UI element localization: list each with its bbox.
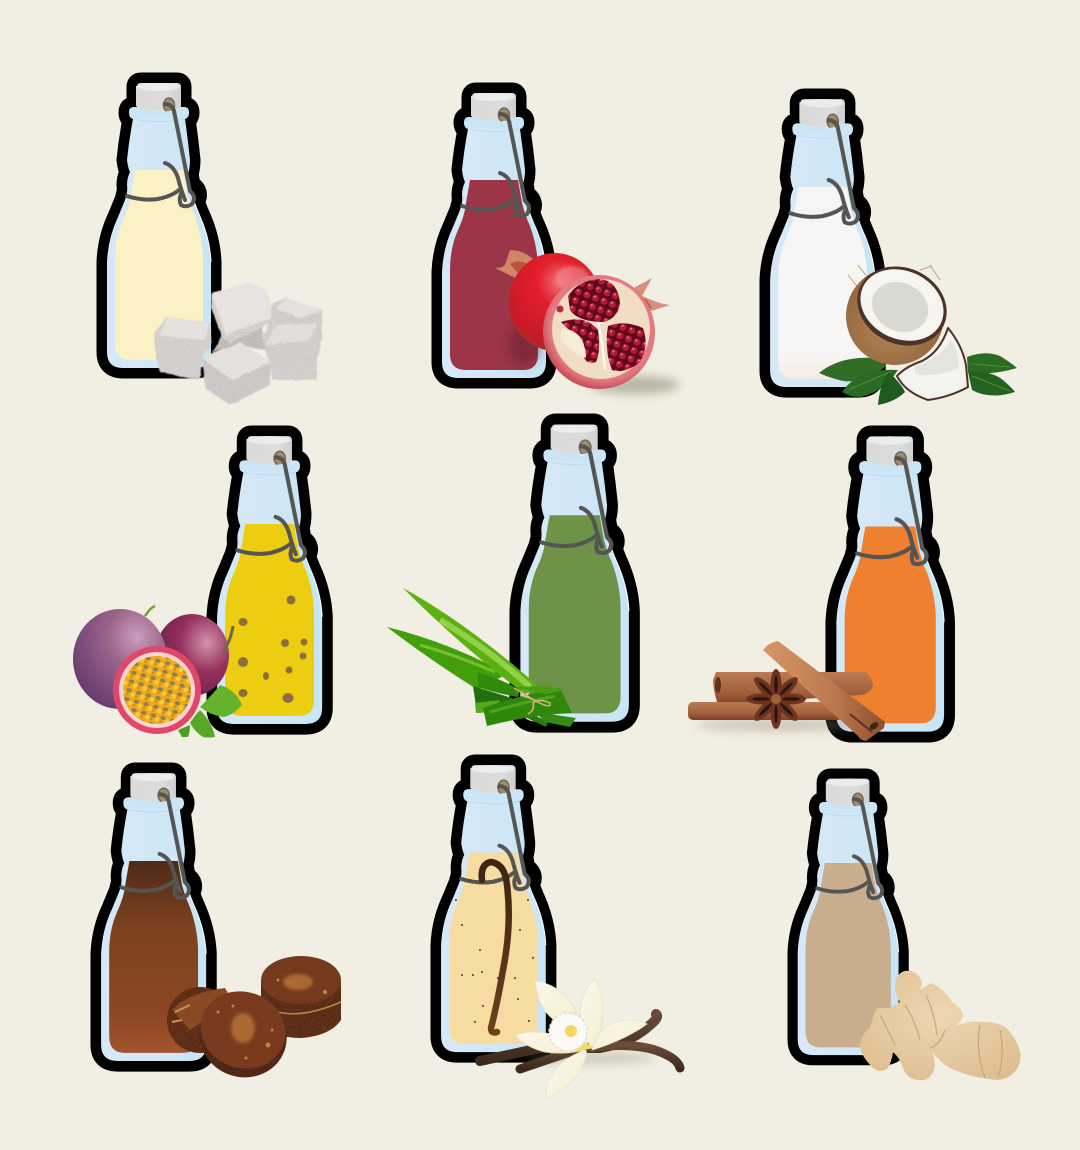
icon: palm sugar discs	[167, 956, 341, 1090]
bottle: palm sugar syrup	[101, 773, 206, 1061]
bottle: coconut syrup	[770, 99, 875, 387]
bottle: spice syrup	[836, 436, 944, 732]
panel: sugar syrup	[107, 83, 322, 405]
panel: passion fruit syrup	[73, 436, 322, 738]
icon: coconut and leaves	[819, 252, 1017, 405]
syrup seeds	[238, 596, 308, 703]
bottle: vanilla syrup	[441, 765, 546, 1052]
syrup vanilla bean and specks	[455, 862, 534, 1032]
bottle: pandan syrup	[520, 424, 629, 722]
panel: coconut syrup	[770, 99, 1017, 405]
icon: sugar cubes	[154, 283, 322, 405]
panel: pomegranate syrup	[442, 93, 680, 398]
bottle: sugar syrup	[107, 83, 211, 368]
panel: palm sugar syrup	[101, 773, 341, 1090]
panel: ginger syrup	[798, 779, 1021, 1080]
bottle: pomegranate syrup	[442, 93, 546, 378]
icon: pomegranate	[495, 250, 680, 398]
icon: cinnamon and star anise	[688, 641, 885, 741]
icon: ginger root	[860, 971, 1021, 1080]
icon: vanilla flower and pods	[480, 979, 680, 1098]
bottle: ginger syrup	[798, 779, 899, 1055]
bottle: passion fruit syrup	[217, 436, 322, 724]
icon: pandan leaves	[387, 588, 576, 727]
panel: vanilla syrup	[441, 765, 680, 1098]
icon: passion fruit	[73, 606, 242, 738]
panel: spice syrup	[688, 436, 944, 741]
panel: pandan syrup	[387, 424, 629, 727]
